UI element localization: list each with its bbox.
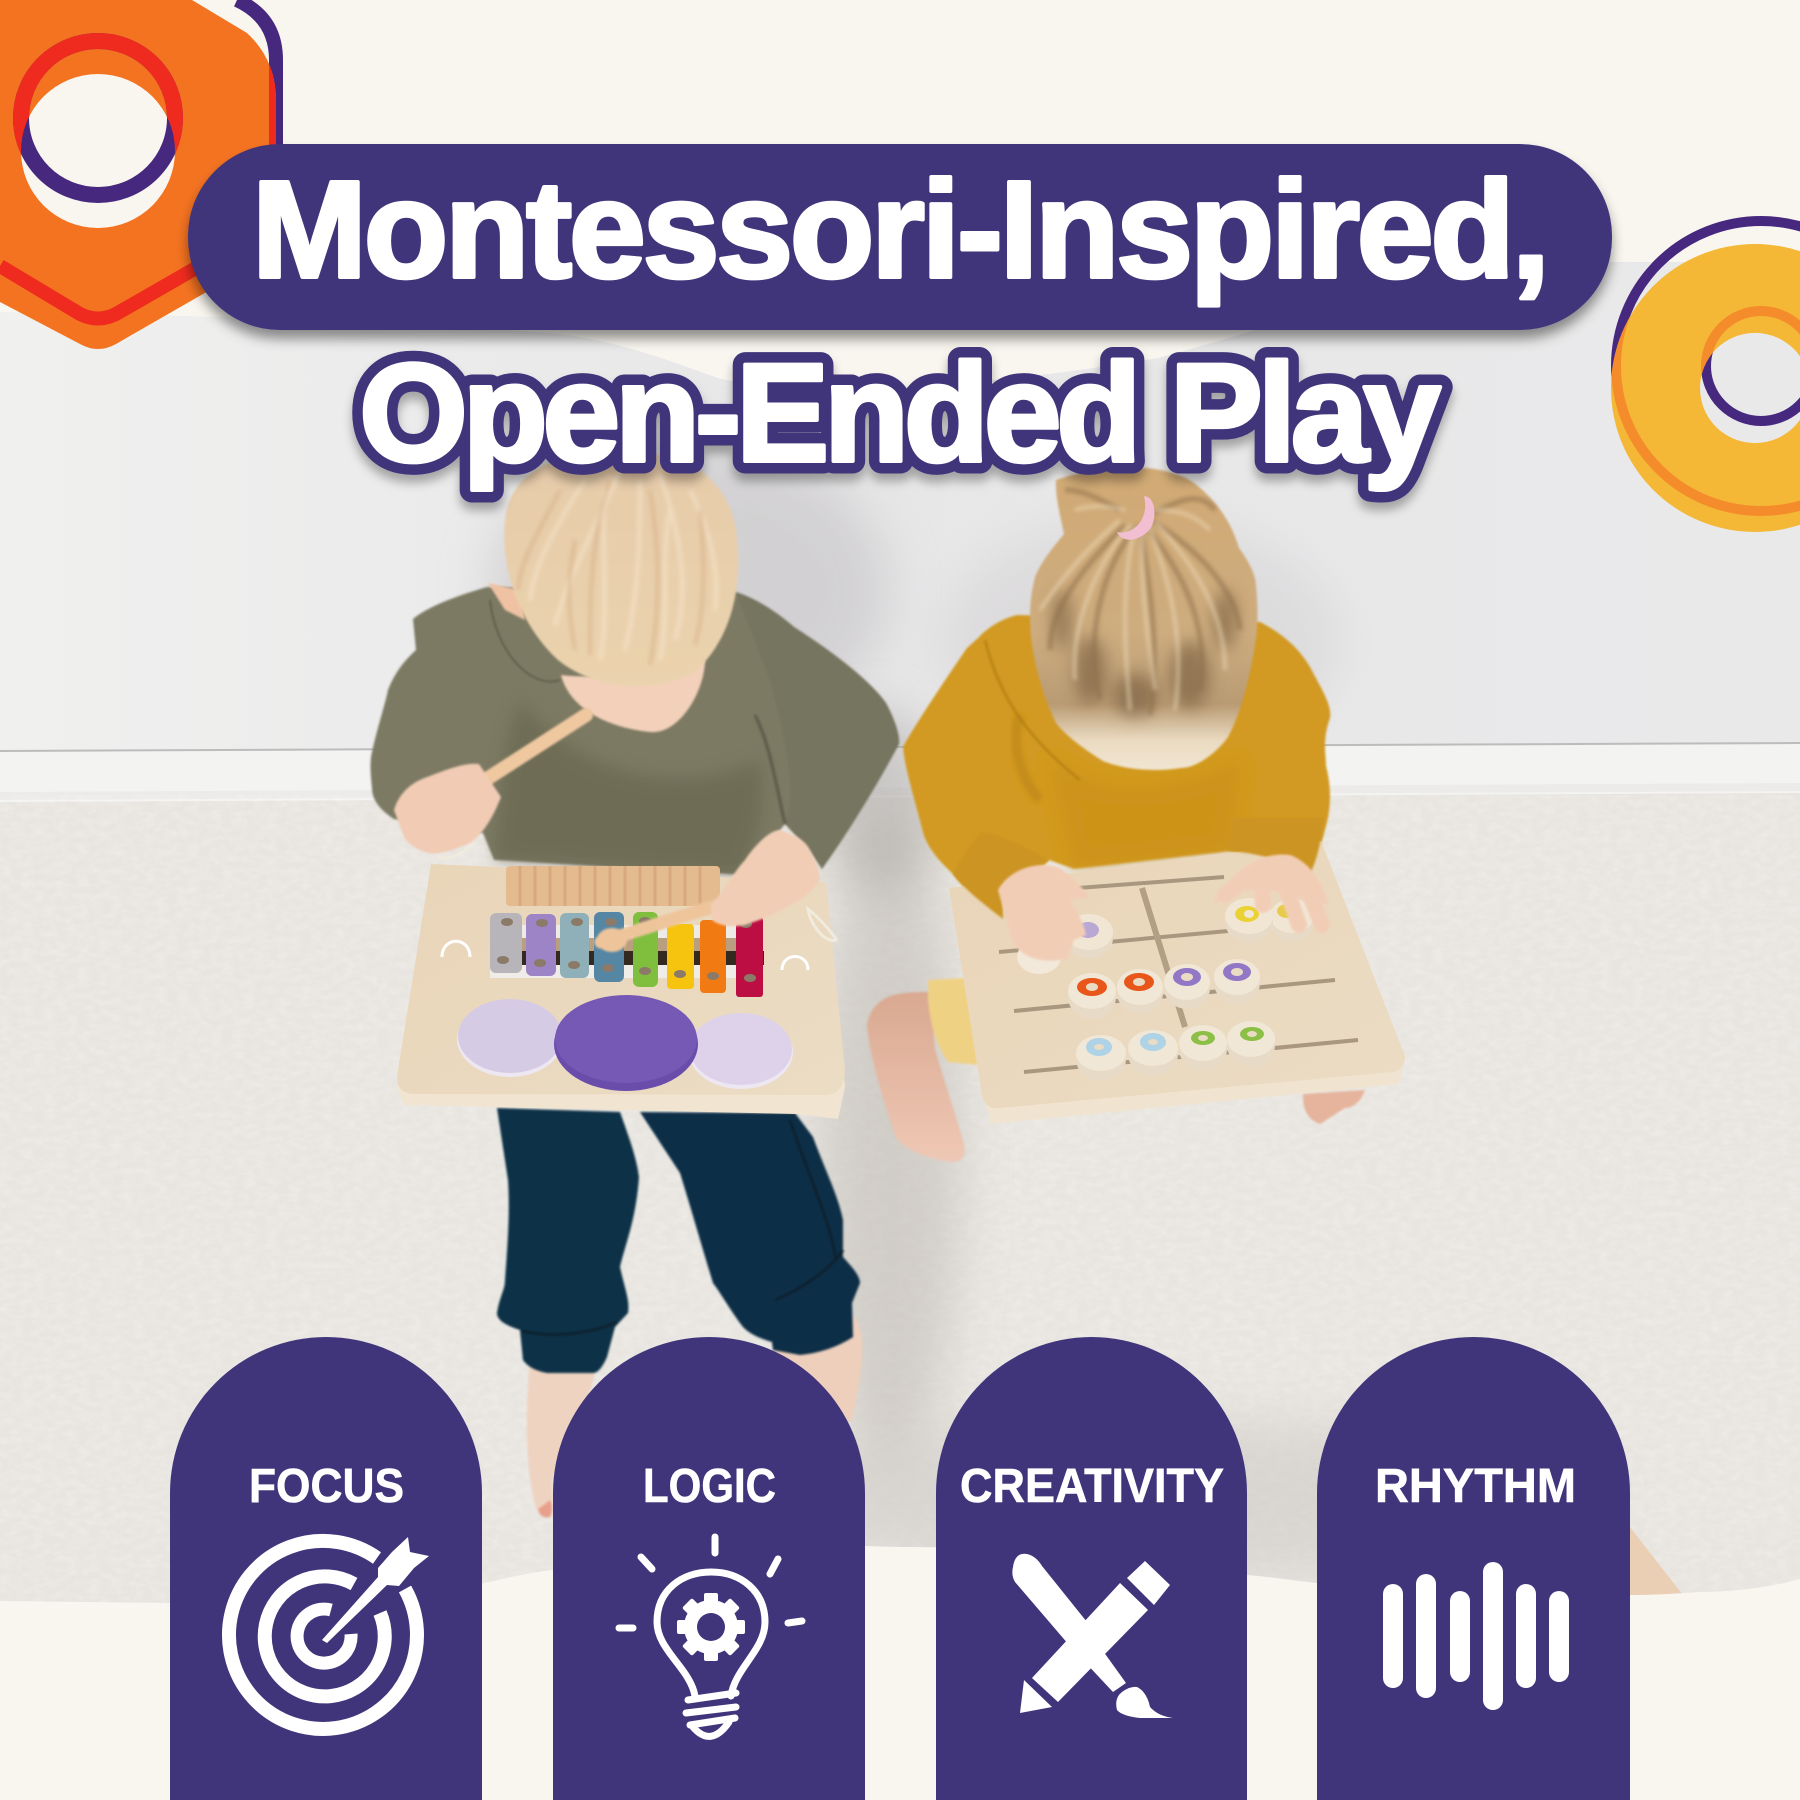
baseboard (0, 743, 1800, 802)
string loops (438, 835, 836, 970)
icon: crossed pencil and brush (1012, 1554, 1173, 1718)
adult foot at lower right (1630, 1527, 1683, 1600)
xylophone rails (490, 925, 764, 978)
panel: logic (553, 1337, 865, 1800)
wooden guiro (506, 866, 720, 906)
girl: foot and trousers (867, 978, 1365, 1162)
boy: olive shirt (370, 587, 899, 875)
girl: wooden shape-sorting board (949, 841, 1405, 1124)
purple ring lines (1616, 221, 1800, 511)
drum pads (457, 995, 793, 1091)
label: creativity: CREATIVITY (960, 1460, 1224, 1513)
hexagon outline (0, 0, 276, 318)
girl: hands (998, 854, 1328, 961)
boy: hands and mallets (394, 715, 820, 952)
photo: two children playing with wooden boards (0, 240, 1800, 1620)
girl: blond hair and hair tie (1030, 467, 1258, 770)
boy: wooden music board (397, 835, 845, 1119)
shadow behind children on wall (490, 440, 1340, 890)
wooden pegs row 1 (1017, 898, 1314, 974)
wall (0, 240, 1800, 760)
orange hexagon with round hole (0, 0, 276, 349)
girl: sweater cuffs over the board (952, 834, 1323, 920)
decoration: yellow donut with ring (1611, 221, 1800, 532)
icon: light bulb with gear (619, 1537, 802, 1736)
icon: sound wave bars (1383, 1562, 1569, 1710)
title banner: first headline line: Montessori-Inspired, (252, 153, 1550, 307)
boy: navy trousers (497, 1108, 860, 1373)
yellow donut (1611, 244, 1800, 532)
boy: face and ear (488, 583, 705, 732)
title: second headline line: Open-Ended Play (359, 334, 1441, 491)
decoration: orange hexagon with ring (0, 0, 276, 349)
title: second headline line: Open-Ended Play (359, 334, 1441, 491)
panel: creativity (936, 1337, 1247, 1800)
panel: focus (170, 1337, 482, 1800)
carpet (0, 793, 1800, 1620)
orange overprint of ring lines (1616, 221, 1800, 511)
label: rhythm: RHYTHM (1375, 1460, 1576, 1513)
wooden pegs row 2 (1068, 959, 1260, 1019)
girl: mustard sweater (903, 615, 1330, 919)
ring, purple part (21, 41, 175, 195)
xylophone bars (490, 912, 763, 997)
wooden pegs row 3 (1076, 1021, 1275, 1071)
boy: blond hair (504, 452, 738, 686)
panel: rhythm (1317, 1337, 1630, 1800)
label: logic: LOGIC (643, 1460, 776, 1513)
red overprint inside hexagon (0, 0, 276, 318)
board slots (999, 877, 1358, 1072)
boy: feet (527, 1317, 862, 1518)
icon: target with arrow (229, 1537, 429, 1729)
label: focus: FOCUS (249, 1460, 404, 1513)
